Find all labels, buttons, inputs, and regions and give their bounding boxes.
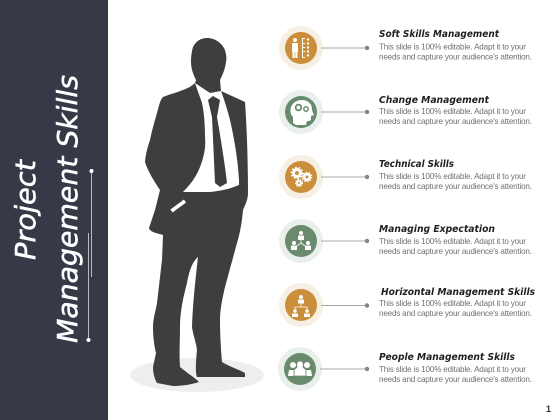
text block: Technical Skills	[379, 159, 454, 170]
text block: needs and capture your audience's attention.	[379, 182, 532, 191]
item: People Management Skills	[278, 347, 532, 391]
icon: connected team	[279, 219, 323, 263]
connector	[321, 175, 369, 179]
item: Soft Skills Management	[279, 26, 532, 70]
connector	[321, 239, 369, 243]
icon: head with gears	[279, 90, 323, 134]
title accent lines	[86, 169, 94, 342]
text block: needs and capture your audience's attention.	[379, 117, 532, 126]
icon: group of people	[278, 347, 322, 391]
connector	[320, 367, 369, 371]
title	[9, 75, 84, 343]
text block: Managing Expectation	[379, 224, 495, 235]
text block: This slide is 100% editable. Adapt it to your	[379, 365, 526, 374]
text block	[379, 159, 532, 191]
text block: This slide is 100% editable. Adapt it to your	[379, 42, 526, 52]
icon: person with checklist	[279, 26, 323, 70]
text block: needs and capture your audience's attention.	[379, 247, 532, 256]
connector	[321, 46, 369, 50]
text block: This slide is 100% editable. Adapt it to your	[379, 172, 526, 181]
connector	[321, 110, 369, 114]
text block: Change Management	[379, 95, 490, 106]
businessman silhouette	[145, 38, 248, 386]
text block: This slide is 100% editable. Adapt it to your	[379, 299, 526, 308]
tie	[208, 96, 227, 187]
item: Technical Skills	[279, 155, 532, 199]
connector	[321, 303, 369, 308]
icon: gears	[279, 155, 323, 199]
text block	[379, 352, 532, 384]
floor shadow	[130, 358, 264, 392]
panel: left title sidebar	[0, 0, 108, 420]
item: Managing Expectation	[279, 219, 532, 263]
pocket square	[172, 201, 185, 211]
text block: Horizontal Management Skills	[381, 287, 535, 298]
text block: People Management Skills	[379, 352, 515, 363]
shirt	[183, 83, 239, 192]
text block: This slide is 100% editable. Adapt it to your	[379, 237, 526, 246]
title: Management Skills	[51, 75, 84, 343]
text block	[379, 29, 532, 62]
icon: hierarchy chart	[279, 283, 323, 327]
page number: 1	[546, 404, 551, 414]
item: Change Management	[279, 90, 532, 134]
text block	[379, 95, 532, 126]
text block	[379, 224, 532, 256]
text block: needs and capture your audience's attention.	[379, 52, 532, 62]
text block: needs and capture your audience's attention.	[379, 375, 532, 384]
neck	[196, 78, 220, 92]
text block: This slide is 100% editable. Adapt it to your	[379, 107, 526, 116]
title: Project	[9, 159, 42, 260]
text block: Soft Skills Management	[379, 29, 500, 40]
text block	[379, 287, 535, 318]
item: Horizontal Management Skills	[279, 283, 535, 327]
text block: needs and capture your audience's attention.	[379, 309, 532, 318]
